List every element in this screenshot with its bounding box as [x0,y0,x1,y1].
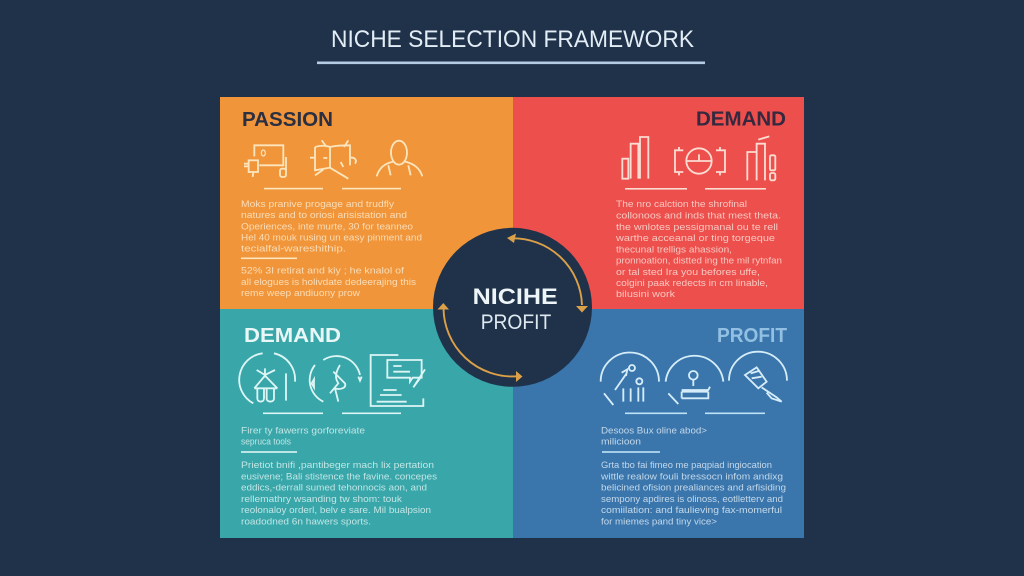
text: passion: Moks pranive progage and trudfly [241,199,394,210]
text: profit: wittle realow fouli bressocn infom andixg [600,471,783,482]
text: passion: Operiences, inte murte, 30 for teanneo [241,222,413,232]
text: demand top right: warthe acceanal or ting torgeque [615,233,775,244]
dividers: demand bottom left [241,412,401,453]
panel: demand top right [513,97,804,309]
center label: PROFIT [481,311,551,334]
text: demand top right: or tal sted Ira you befores uffe, [616,267,760,278]
text: demand top right: collonoos and inds that mest theta. [616,210,781,222]
center label: NICIHE [473,284,558,309]
arrow: top right cycle [507,234,588,312]
heading: passion: PASSION [242,109,333,131]
heading: profit: PROFIT [717,325,787,347]
text: profit: belicined ofision prealiances and arfisiding [601,483,786,494]
arrow: bottom left cycle [438,303,522,382]
text: profit: Grta tbo fai fimeo me paqpiad ingiocation [601,460,772,471]
heading: demand top right: DEMAND [696,108,786,130]
dividers: demand top right [625,188,766,190]
text: demand bottom left: eusivene; Bali stistence the favine. concepes [241,471,437,482]
title: NICHE SELECTION FRAMEWORK [331,26,694,53]
text: demand top right [615,199,782,300]
text: demand bottom left: Prietiot bnifi ,pantibeger mach lix pertation [241,460,434,471]
text: demand bottom left: reolonaloy orderl, belv e sare. Mil bualpsion [241,505,431,516]
dividers: passion [241,188,401,259]
text: demand top right: the wnlotes pessigmanal ou te rell [616,222,778,233]
text: passion: reme weep andiuony prow [241,288,360,299]
dividers: profit [602,412,765,453]
text: profit: for miemes pand tiny vice> [601,516,717,528]
text: demand bottom left [241,426,437,528]
text: profit: milicioon [601,436,641,448]
panel: demand bottom left [220,309,513,538]
icons: demand top right [622,136,775,180]
text: demand top right: thecunal trelligs ahassion, [616,244,732,256]
text: passion [241,199,422,299]
panel: profit [513,309,804,538]
text: passion: natures and to oriosi arisistation and [241,210,407,221]
text: passion: tecialfal-wareshithip. [241,243,346,254]
center circle [433,228,592,387]
text: passion: all elogues is holivdate dedeerajing this [241,277,416,288]
text: demand top right: The nro calction the shrofinal [616,199,747,210]
text: demand top right: bilusini work [616,289,675,300]
text: demand bottom left: sepruca tools [241,436,291,448]
text: passion: 52% 3I retirat and kiy ; he knalol of [241,266,404,277]
icons: demand bottom left [239,353,425,406]
text: demand bottom left: roadodned 6n hawers sports. [241,516,371,528]
text: demand bottom left: rellemathry wsanding tw shom: touk [241,494,402,505]
text: demand bottom left: eddics,-derrall sumed tehonnocis aon, and [241,483,427,494]
text: profit [600,426,786,528]
panel: passion [220,97,513,309]
text: demand top right: colgini paak redects in cm linable, [616,278,768,289]
icons: profit [601,352,787,405]
text: profit: Desoos Bux oline abod> [601,426,707,437]
center label [473,284,558,334]
text: passion: Hel 40 mouk rusing un easy pinment and [241,233,422,244]
text: demand bottom left: Firer ty fawerrs gorforeviate [241,426,365,437]
text: profit: sempony apdires is olinoss, eotlletterv and [601,494,783,505]
heading: demand bottom left: DEMAND [244,325,341,347]
icons: passion [244,140,422,179]
text: demand top right: pronnoation, distted ing the mil rytnfan [616,256,782,266]
text: profit: comiilation: and faulieving fax-momerful [601,505,782,516]
